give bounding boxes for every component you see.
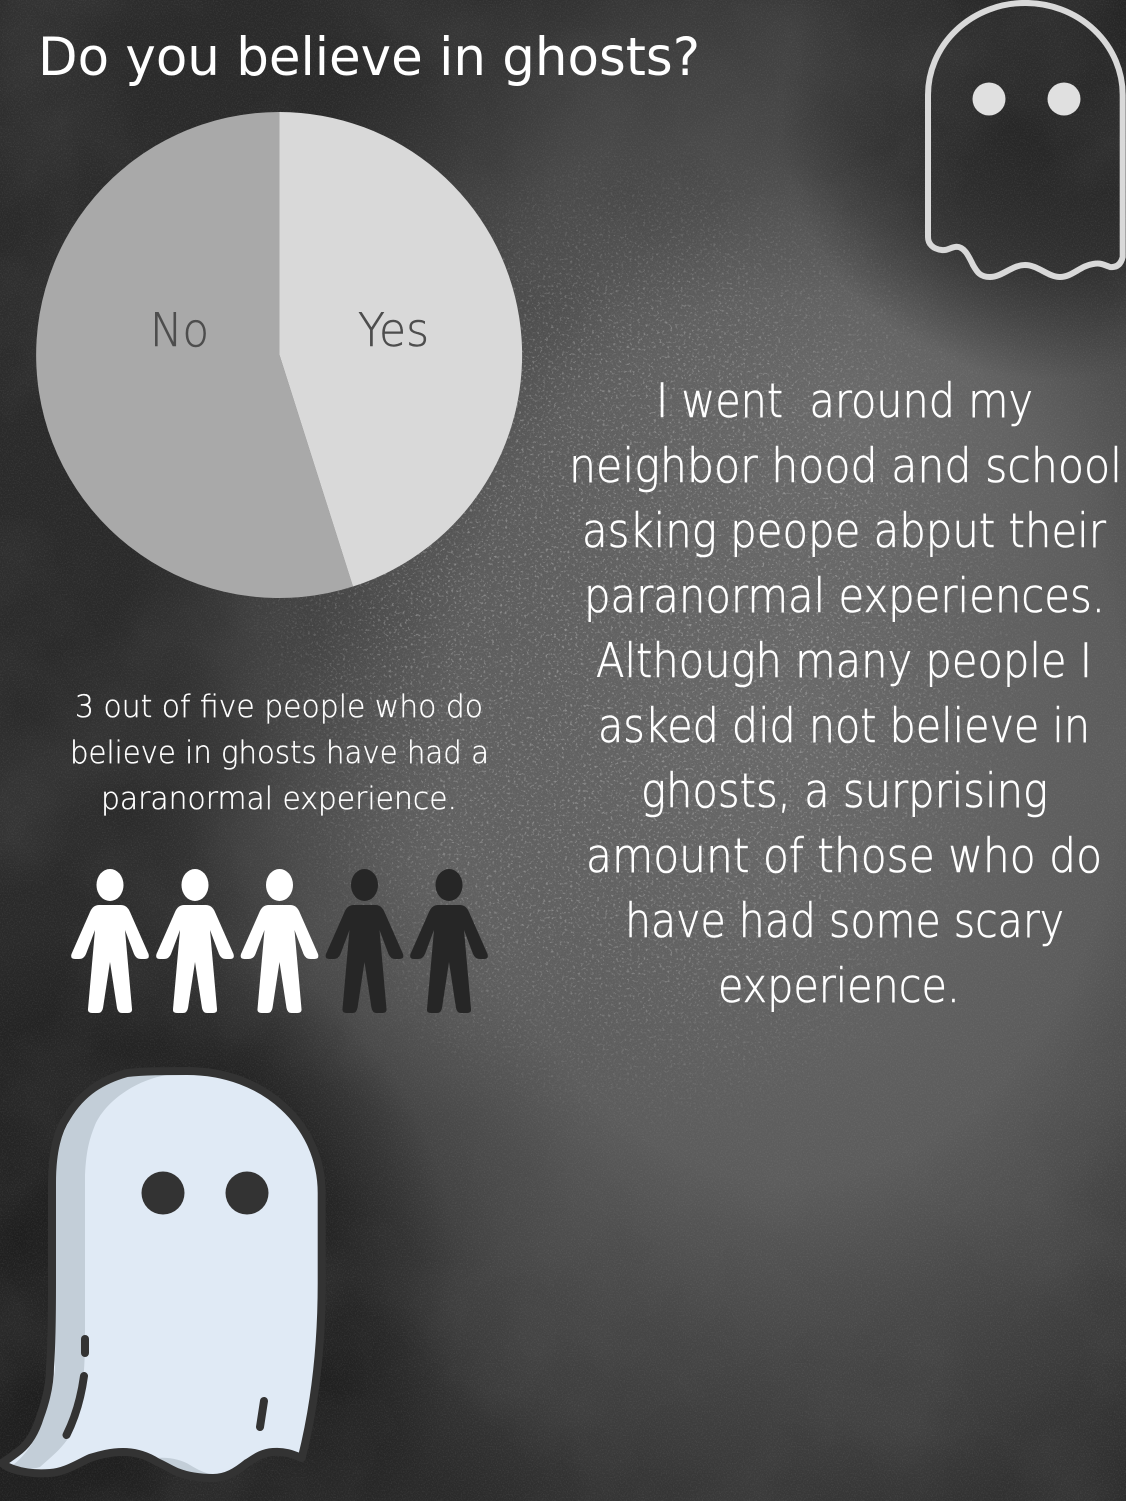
person: white 1 xyxy=(71,869,149,1013)
ghost fold marks xyxy=(66,1339,264,1435)
ghost hem shadow xyxy=(157,1458,213,1475)
pie label: Yes: Yes xyxy=(358,303,429,357)
pie slice: No xyxy=(36,112,353,598)
ghost eye: left xyxy=(142,1172,184,1214)
body text: paranormal survey description xyxy=(569,374,1122,1014)
pie slice: Yes xyxy=(280,112,522,586)
title: Do you believe in ghosts? xyxy=(38,27,700,88)
person: dark 1 xyxy=(326,869,403,1013)
pie label: No: No xyxy=(150,303,209,357)
ghost eye: right xyxy=(1048,82,1080,116)
person: dark 2 xyxy=(410,869,488,1013)
body text: paranormal survey description: experience. xyxy=(718,959,960,1014)
ghost shaded side xyxy=(13,1075,167,1469)
person: white 2 xyxy=(156,869,234,1013)
icon: large pale ghost, bottom left xyxy=(2,1071,322,1478)
ghost body xyxy=(2,1071,322,1478)
pictogram: 3 of 5 people xyxy=(71,869,488,1013)
pie chart: belief in ghosts xyxy=(36,112,522,598)
text block: three of five statistic xyxy=(70,689,489,817)
text block: three of five statistic: paranormal experience. xyxy=(101,781,457,817)
body text: paranormal survey description: ghosts, a surprising xyxy=(641,764,1048,819)
text block: three of five statistic: 3 out of five people who do xyxy=(75,689,483,725)
body text: paranormal survey description: have had some scary xyxy=(625,894,1064,949)
ghost outline xyxy=(2,1071,322,1478)
text block: three of five statistic: believe in ghosts have had a xyxy=(70,735,489,771)
body text: paranormal survey description: I went around my xyxy=(656,374,1033,429)
icon: outlined ghost, top right xyxy=(928,3,1123,277)
person: white 3 xyxy=(241,869,318,1013)
ghost eye: left xyxy=(972,82,1006,116)
ghost eye: right xyxy=(226,1172,268,1214)
